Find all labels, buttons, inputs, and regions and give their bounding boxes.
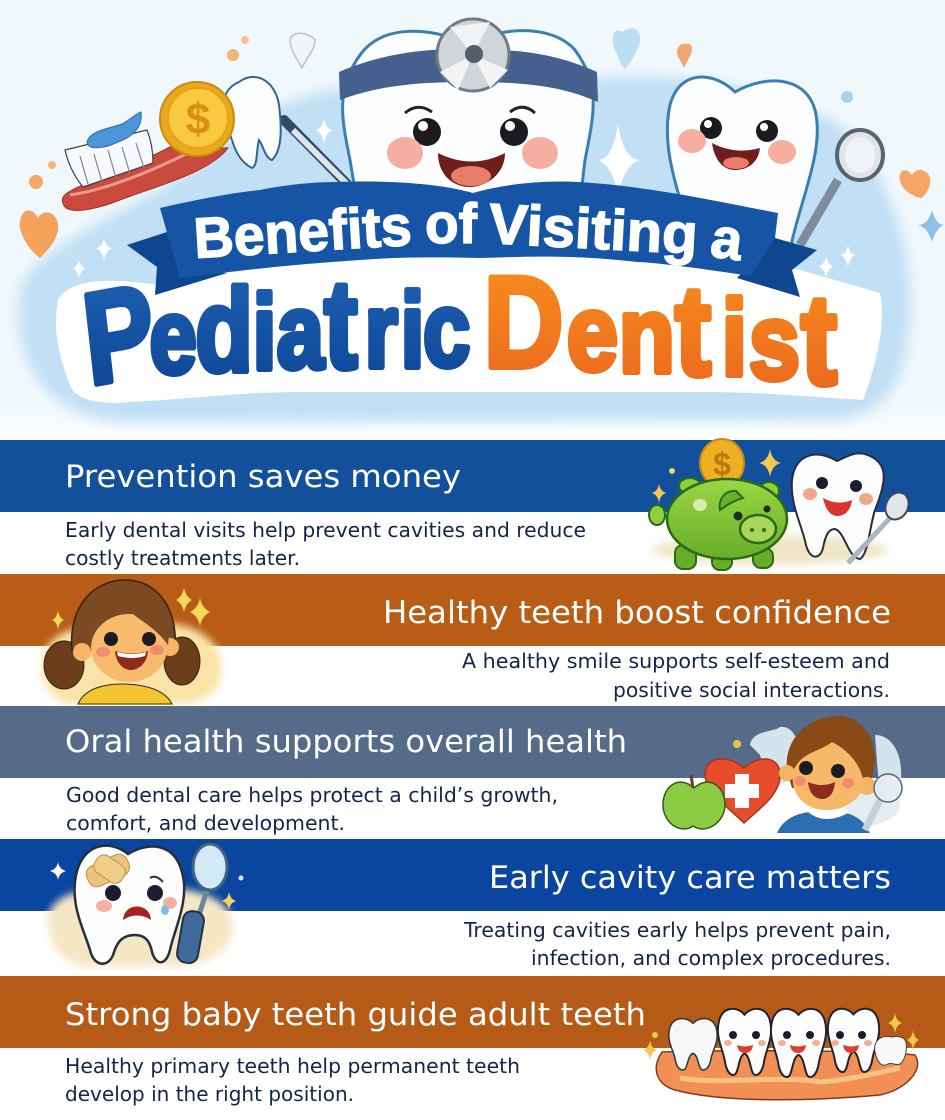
body text [66,783,558,835]
body text: costly treatments later. [65,546,300,570]
icon: small tooth [223,77,281,168]
body text: A healthy smile supports self-esteem and [462,649,890,673]
title: Pediatric: t [324,255,358,396]
title: Pediatric: d [195,264,253,396]
header background [0,0,945,440]
panel: oral health supports overall health [0,706,945,839]
body text [65,1054,520,1106]
mascot: right tooth [667,77,817,250]
icon: smiling girl [42,580,221,704]
title: Pediatric: e [150,278,197,396]
title: Pediatric: c [423,271,470,389]
icon: toothbrush [62,112,228,210]
title: Pediatric: ia [253,273,325,392]
body text: Healthy primary teeth help permanent teeth [65,1054,520,1078]
icon: gold coin [160,82,234,156]
panel: healthy teeth boost confidence [0,574,945,706]
title: Benefits of Visiting a: of [425,192,478,256]
icon: sad tooth with bandage and mirror [48,844,244,966]
title: Benefits of Visiting a: Visiting [487,192,699,267]
panel: early cavity care matters [0,839,945,976]
icon: row of smiling teeth on gums [643,1009,919,1100]
heading: Prevention saves money [65,459,461,495]
decorative hearts, drops and sparkles [20,28,944,278]
body text: comfort, and development. [66,811,345,835]
title: Dentist: t [801,269,837,412]
body text: infection, and complex procedures. [531,946,891,970]
title: Dentist: is [722,278,800,403]
title: Benefits of Visiting a [192,192,748,273]
heading: Oral health supports overall health [65,724,627,760]
icon: dental mirror [800,130,883,245]
icon: gold coin: $ [186,95,210,144]
ribbon banner [127,182,817,297]
body text [462,649,890,702]
heading: Early cavity care matters [489,860,891,896]
panel: prevention saves money [0,439,945,574]
white cloud behind title [56,250,882,403]
body text: Early dental visits help prevent cavities and reduce [65,518,586,542]
title: Dentist: t [675,260,711,403]
title: Dentist: en [567,273,675,396]
title: Pediatric: ri [365,272,424,390]
heading: Strong baby teeth guide adult teeth [65,997,646,1033]
heading: Healthy teeth boost confidence [383,595,891,631]
title: Dentist: D [484,250,563,395]
panel: strong baby teeth guide adult teeth [0,976,945,1120]
icon: piggy bank, coin and tooth: $ [713,446,731,482]
mascot: large tooth with headband [339,19,598,220]
body text [463,918,891,970]
icon: piggy bank, coin and tooth [649,439,913,570]
title: Pediatric: P [76,256,161,412]
body text: positive social interactions. [613,678,890,702]
body text: Good dental care helps protect a child’s growth, [66,783,558,807]
title: Benefits of Visiting a: Benefits [192,194,413,271]
body text: Treating cavities early helps prevent pain, [463,918,891,942]
icon: dental tool [284,120,347,184]
body text: develop in the right position. [65,1082,354,1106]
title: Benefits of Visiting a: a [707,205,748,273]
body text [65,518,586,570]
icon: apple, heart and boy [663,716,902,833]
